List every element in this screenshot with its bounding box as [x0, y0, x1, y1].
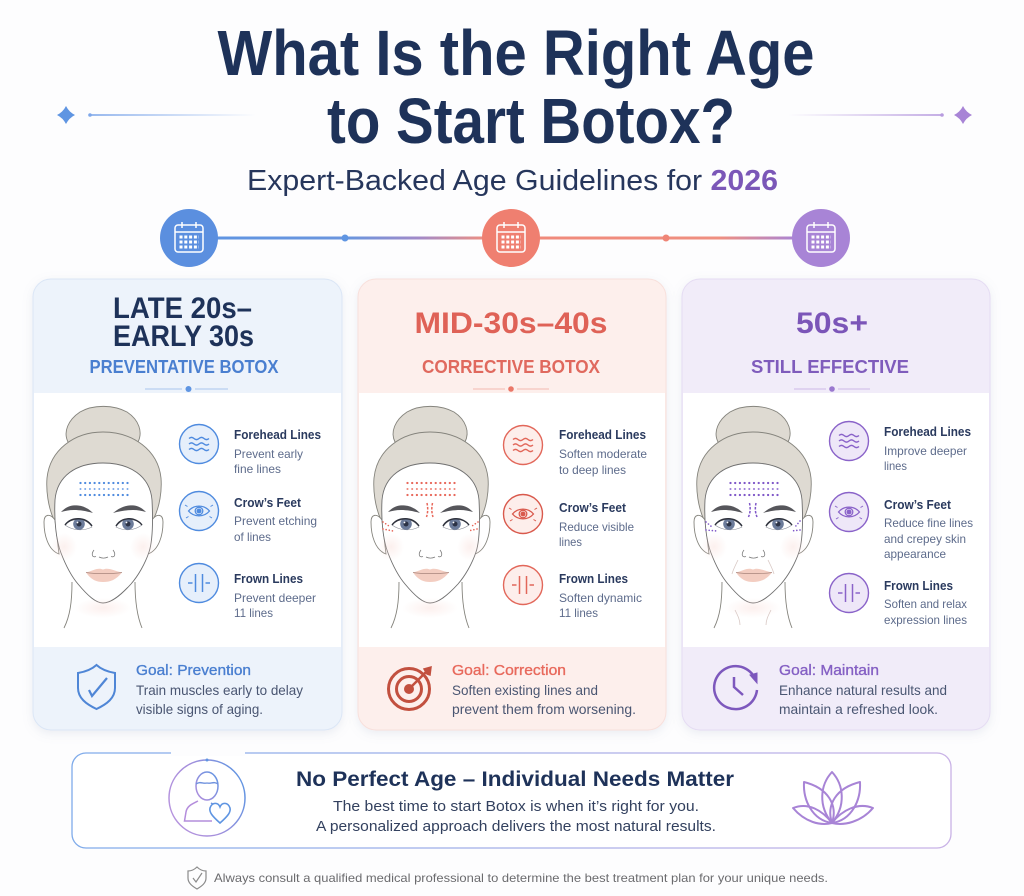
decoration: right star and line	[788, 106, 972, 124]
text: frown lines: Frown Lines	[559, 572, 628, 586]
panel: late 20s to early 30s	[33, 279, 342, 730]
icon: frown lines	[180, 564, 218, 602]
heading: age range: MID-30s–40s	[414, 307, 608, 340]
icon: person with heart	[169, 758, 245, 836]
text: goal prevention: visible signs of aging.	[136, 701, 263, 717]
text: frown lines	[559, 572, 642, 620]
text: forehead lines: Soften moderate	[559, 447, 647, 461]
icon: frown lines	[830, 574, 868, 612]
text: frown lines: Soften and relax	[884, 597, 967, 611]
text: forehead lines: Prevent early	[234, 447, 303, 461]
decoration: left star and line	[57, 106, 256, 124]
text: goal correction: prevent them from worsening.	[452, 701, 636, 717]
text: goal maintain	[779, 662, 947, 717]
title: What Is the Right Age	[218, 17, 814, 89]
text: frown lines: Frown Lines	[234, 572, 303, 586]
icon: forehead lines	[180, 424, 218, 464]
text: goal prevention	[136, 662, 303, 717]
footer disclaimer: Always consult a qualified medical professional to determine the best treatment plan for your unique needs.	[214, 871, 828, 885]
text: crow's feet	[234, 496, 317, 544]
text: forehead lines: Improve deeper	[884, 444, 967, 458]
text: goal prevention: Goal: Prevention	[136, 662, 251, 679]
text: forehead lines: Forehead Lines	[234, 428, 321, 442]
illustration: mature face with injection dots	[694, 406, 813, 628]
divider dot	[145, 386, 228, 392]
text: crow's feet: Prevent etching	[234, 514, 317, 528]
text: forehead lines	[559, 428, 647, 477]
text: forehead lines	[234, 428, 321, 476]
text: crow's feet: appearance	[884, 547, 946, 561]
text: crow's feet	[559, 501, 634, 549]
icon: target with arrow	[388, 667, 431, 710]
text: goal maintain: maintain a refreshed look.	[779, 701, 938, 717]
illustration: face with forehead dots	[44, 406, 163, 628]
icon: purple calendar	[792, 209, 850, 267]
icon: forehead lines	[830, 422, 868, 460]
icon: lotus	[793, 772, 873, 824]
text: crow's feet: Crow’s Feet	[884, 498, 952, 512]
text: forehead lines	[884, 425, 971, 473]
text: goal correction: Soften existing lines and	[452, 682, 598, 698]
text: crow's feet: Crow’s Feet	[234, 496, 302, 510]
icon: shield check	[78, 665, 115, 709]
icon: coral calendar	[482, 209, 540, 267]
text: crow's feet: Reduce fine lines	[884, 516, 973, 530]
text: crow's feet: of lines	[234, 530, 271, 544]
text: goal maintain: Goal: Maintain	[779, 662, 879, 679]
text: goal correction	[452, 662, 636, 717]
timeline	[160, 209, 850, 267]
text: callout heading: No Perfect Age – Individual Needs Matter	[296, 768, 734, 791]
text: goal prevention: Train muscles early to delay	[136, 682, 303, 698]
text: frown lines: Frown Lines	[884, 579, 953, 593]
text: callout body	[316, 799, 716, 835]
heading: age range: LATE 20s–	[113, 292, 252, 325]
icon: crow's feet	[180, 492, 218, 530]
illustration: face with forehead, frown and crow's feet dots	[371, 406, 490, 628]
divider dot	[473, 386, 549, 392]
icon: frown lines	[504, 566, 542, 604]
text: frown lines: Prevent deeper	[234, 591, 316, 605]
text: forehead lines: fine lines	[234, 462, 281, 476]
text: callout body: A personalized approach delivers the most natural results.	[316, 819, 716, 835]
icon: blue calendar	[160, 209, 218, 267]
text: frown lines	[234, 572, 316, 620]
text: frown lines	[884, 579, 967, 627]
title: to Start Botox?	[327, 85, 735, 157]
text: frown lines: 11 lines	[559, 606, 598, 620]
text: crow's feet: and crepey skin	[884, 532, 966, 546]
text: frown lines: Soften dynamic	[559, 591, 642, 605]
subheading: CORRECTIVE BOTOX	[422, 357, 600, 377]
icon: clock	[714, 666, 757, 709]
subtitle: Expert-Backed Age Guidelines for 2026	[247, 165, 778, 197]
text: crow's feet: Crow’s Feet	[559, 501, 627, 515]
text: forehead lines: Forehead Lines	[884, 425, 971, 439]
text: crow's feet: Reduce visible	[559, 520, 634, 534]
divider dot	[794, 386, 870, 392]
text: callout body: The best time to start Botox is when it’s right for you.	[333, 799, 699, 815]
heading: age range: 50s+	[796, 307, 868, 340]
subheading: PREVENTATIVE BOTOX	[90, 357, 278, 377]
icon: crow's feet	[504, 494, 542, 534]
text: forehead lines: to deep lines	[559, 463, 626, 477]
text: frown lines: 11 lines	[234, 606, 273, 620]
heading: age range second line: EARLY 30s	[113, 320, 254, 353]
text: forehead lines: lines	[884, 459, 907, 473]
text: forehead lines: Forehead Lines	[559, 428, 646, 442]
panel: 50s plus	[682, 279, 990, 730]
icon: crow's feet	[830, 492, 868, 532]
text: frown lines: expression lines	[884, 613, 967, 627]
title	[218, 17, 814, 157]
icon: footer shield	[188, 867, 206, 889]
text: crow's feet: lines	[559, 535, 582, 549]
icon: forehead lines	[504, 426, 542, 464]
subheading: STILL EFFECTIVE	[751, 357, 909, 377]
text: goal maintain: Enhance natural results and	[779, 682, 947, 698]
callout: no perfect age	[72, 750, 951, 848]
panel: mid 30s to 40s	[358, 279, 666, 730]
text: goal correction: Goal: Correction	[452, 662, 566, 679]
text: crow's feet	[884, 498, 973, 561]
